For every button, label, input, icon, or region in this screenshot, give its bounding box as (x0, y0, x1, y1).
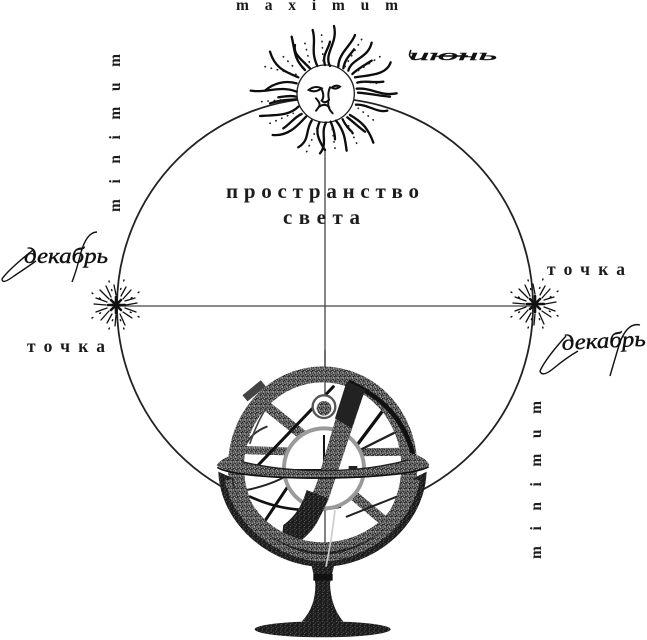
handwriting: декабрь right (540, 325, 646, 376)
sun face (309, 86, 340, 113)
label: точка left: точка (27, 336, 105, 356)
inner rings and straps (243, 350, 407, 547)
bowl (218, 472, 427, 567)
sun rays (251, 26, 397, 153)
stand pointer (326, 510, 335, 567)
clock hands (293, 435, 324, 470)
handwriting: декабрь left: декабрь (24, 243, 108, 268)
base (255, 621, 391, 637)
handwriting: декабрь left (2, 232, 108, 282)
wide diagonal band (283, 382, 365, 542)
orbit circle (117, 98, 533, 514)
heading: пространство света: света (283, 205, 360, 229)
handwriting: декабрь right: декабрь (561, 326, 646, 355)
heading: пространство света (226, 179, 419, 229)
label: minimum right: minimum (528, 401, 545, 559)
label: minimum left: minimum (107, 54, 124, 212)
handwriting: июнь (409, 48, 497, 64)
vertical axis (324, 150, 326, 400)
sun sparks (262, 35, 380, 152)
clock dial (284, 428, 364, 508)
handwriting: июнь: июнь (409, 48, 497, 64)
icon: star left (92, 280, 139, 329)
stand (302, 566, 343, 622)
small ring (313, 395, 335, 418)
horizon ring (217, 453, 429, 479)
heading: пространство света: пространство (226, 179, 419, 203)
sphere back and interior (228, 367, 417, 567)
icon: sun with face (251, 26, 397, 153)
horizontal axis (118, 305, 533, 307)
meridian ring upper (236, 374, 409, 559)
label: точка right: точка (547, 259, 625, 279)
icon: star right (511, 279, 558, 328)
armillary sphere on stand (217, 350, 429, 637)
